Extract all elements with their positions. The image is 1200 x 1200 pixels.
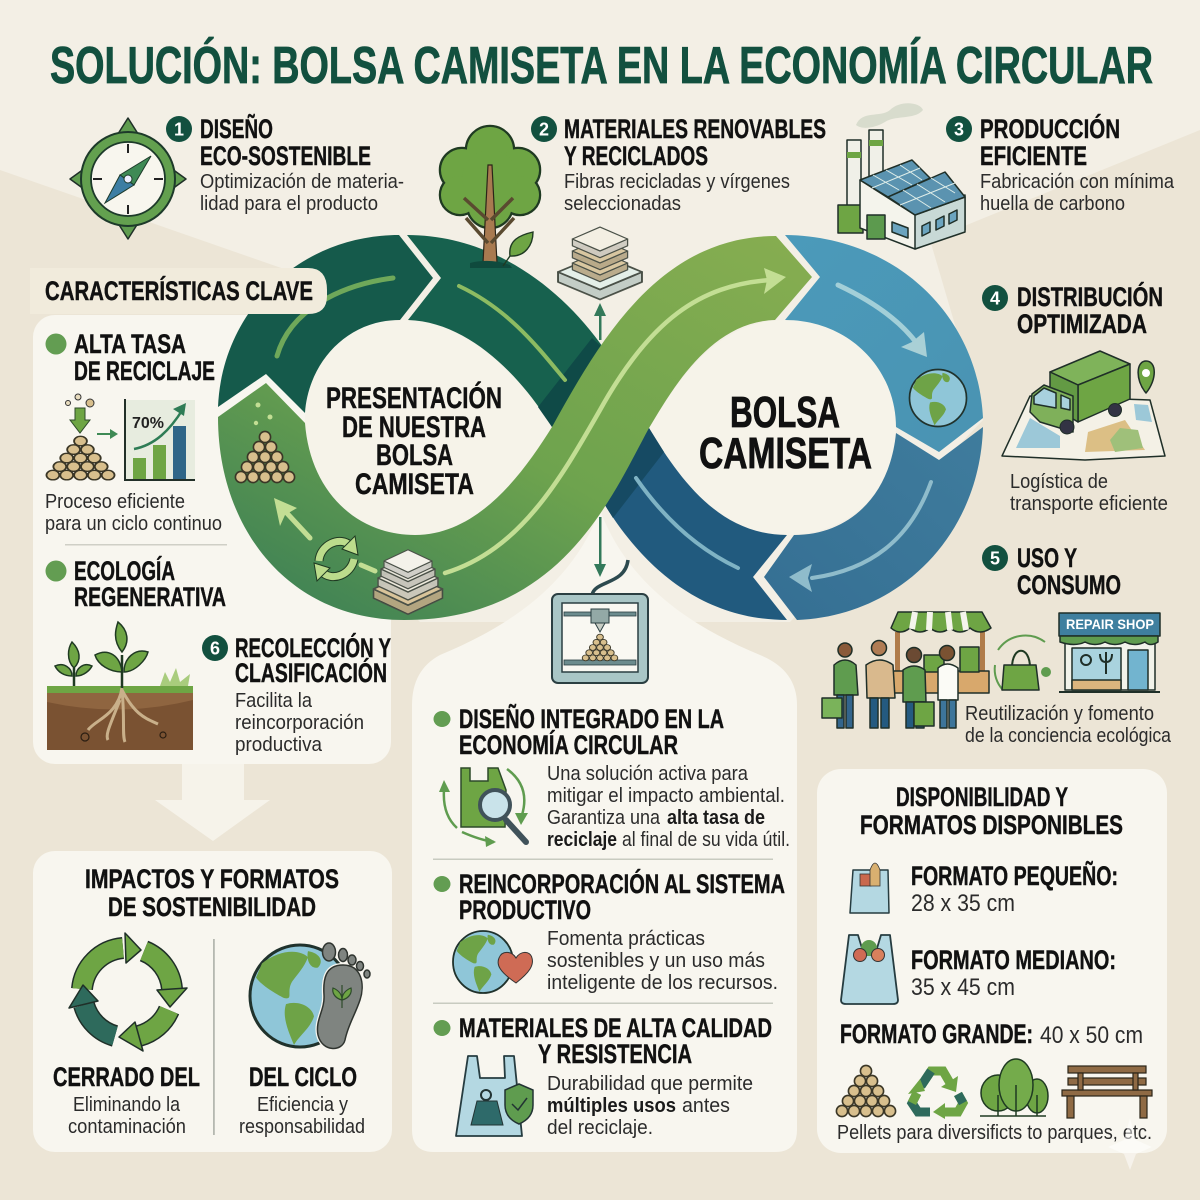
block: alta tasa de reciclaje: Proceso eficiente [45,490,185,513]
item: diseño integrado [434,703,790,851]
segment: dark green top left [218,235,433,413]
step 6: recolección y clasificación: productiva [235,733,323,756]
step 6: recolección y clasificación: reincorporación [235,711,364,734]
loop centre text: left: PRESENTACIÓN [326,381,502,415]
step 5: uso y consumo: CONSUMO [1017,570,1121,600]
loop centre text: right: BOLSA [730,388,840,437]
block: alta tasa de reciclaje: ALTA TASA [74,329,186,359]
icon: bench [1062,1066,1152,1118]
segment: dark blue lower centre [600,428,787,620]
item: diseño integrado: Garantiza una [547,806,661,829]
step 5: uso y consumo [822,543,1172,747]
step 1: diseño eco-sostenible: DISEÑO [200,113,273,144]
panel content: impactos [53,864,370,1138]
item: diseño integrado: alta tasa de [667,806,765,829]
badge 6: 6 [210,638,220,658]
step 3: producción eficiente: PRODUCCIÓN [980,113,1120,144]
step 4: distribución optimizada: transporte eficiente [1010,492,1168,515]
panel: centre background [412,510,797,1152]
badge 5 [982,545,1008,571]
icon: small bag [850,863,889,913]
segment: blue lower right [764,427,983,620]
icon: recycling arrows on loop [314,536,358,581]
badge 2 [531,116,557,142]
icon: market stall and shoppers [822,612,991,728]
panel content: disponibilidad: FORMATO MEDIANO: [911,945,1116,975]
step 5: uso y consumo: Reutilización y fomento [965,702,1154,725]
block: ecología regenerativa [46,555,226,750]
step 1: diseño eco-sostenible: lidad para el producto [200,192,378,215]
icon: material stack [558,227,642,300]
icon: tree [440,126,540,268]
step 1: diseño eco-sostenible [70,113,404,239]
step 6: recolección y clasificación: CLASIFICACIÓN [235,657,387,688]
icon: repair shop [1059,613,1160,692]
panel content: impactos: responsabilidad [239,1115,365,1138]
loop hole fills [305,320,896,535]
step 6: recolección y clasificación: RECOLECCIÓN Y [235,632,391,663]
loop centre text: right: CAMISETA [699,429,872,478]
badge 5: 5 [990,548,1000,568]
item: materiales de alta calidad: MATERIALES DE ALTA CALIDAD [459,1013,772,1043]
panel content: disponibilidad: Pellets para diversificts to parques, etc. [837,1121,1152,1144]
icon: pellets row [836,1065,896,1117]
icon: bag with magnifier [439,768,528,847]
item: materiales de alta calidad: antes [682,1094,730,1117]
icon: recycle triangle [908,1071,963,1119]
panel content: disponibilidad: FORMATOS DISPONIBLES [860,810,1123,840]
step 3: producción eficiente: huella de carbono [980,192,1125,215]
step 6: recolección y clasificación: Facilita la [235,689,313,712]
panel content: impactos: Eliminando la [73,1093,181,1116]
step 5: uso y consumo: USO Y [1017,543,1077,573]
chart: 70 percent bars: 70% [132,415,164,432]
badge 2: 2 [539,120,549,140]
icon: globe on loop [910,370,966,426]
panel content: disponibilidad: 28 x 35 cm [911,890,1015,917]
panel content: disponibilidad [836,782,1152,1170]
step 4: distribución optimizada [982,281,1168,515]
badge 6 [202,635,228,661]
icon: circular arrows [69,933,187,1051]
step 4: distribución optimizada: OPTIMIZADA [1017,309,1147,339]
icon: factory [838,103,965,249]
step 1: diseño eco-sostenible: ECO-SOSTENIBLE [200,141,371,171]
icon: green bag with cycle [995,635,1051,690]
item: reincorporación: PRODUCTIVO [459,895,591,925]
band arrows [277,278,931,578]
arrow: down to impactos [155,764,270,841]
loop centre text: left: CAMISETA [355,468,474,501]
step 3: producción eficiente [838,103,1175,249]
item: materiales de alta calidad: múltiples usos [547,1094,676,1117]
step 3: producción eficiente: EFICIENTE [980,141,1087,171]
panel content: centre [433,703,790,1139]
loop centre text: left [326,381,502,501]
icon: globe with heart [453,931,532,993]
badge 1: 1 [174,120,184,140]
item: diseño integrado: Una solución activa para [547,762,749,785]
step 2: materiales renovables: MATERIALES RENOVABLES [564,114,826,144]
block: alta tasa de reciclaje [45,329,222,535]
step 2: materiales renovables: Y RECICLADOS [564,141,708,171]
item: materiales de alta calidad [434,1013,772,1139]
tab: características clave: CARACTERÍSTICAS CLAVE [45,275,313,306]
block: ecología regenerativa: ECOLOGÍA [74,555,175,586]
item: reincorporación: Fomenta prácticas [547,927,705,950]
panel content: impactos: Eficiencia y [257,1093,349,1116]
infinity loop [218,235,983,620]
chart: 70 percent bars [125,399,195,480]
tab: características clave [30,268,327,314]
arrow: up to materiales [594,303,606,340]
panel content: disponibilidad: 40 x 50 cm [1040,1022,1143,1049]
segment: blue top right [785,235,983,452]
icon: medium bag [841,935,898,1004]
icon: pellets with down arrow [46,394,118,480]
item: materiales de alta calidad: Y RESISTENCIA [538,1039,692,1069]
loop centre text: left: DE NUESTRA [342,411,486,444]
item: diseño integrado: reciclaje [547,828,617,851]
step 6: recolección y clasificación [202,632,391,756]
item: reincorporación: sostenibles y un uso más [547,949,765,972]
segment: green S band [218,236,812,620]
icon: 3D printer [552,560,648,683]
panel content: impactos: IMPACTOS Y FORMATOS [85,864,339,894]
item: reincorporación: inteligente de los recursos. [547,971,778,994]
icon: bag with weight and shield [456,1056,533,1136]
icon: globe and footprint [250,943,370,1048]
block: alta tasa de reciclaje: para un ciclo continuo [45,512,222,535]
item: materiales de alta calidad: Durabilidad que permite [547,1072,753,1095]
panel: impactos background [33,851,392,1152]
item: materiales de alta calidad: del reciclaje. [547,1116,653,1139]
icon: material stack on loop [374,550,442,614]
icon: repair shop: REPAIR SHOP [1066,616,1154,632]
step 2: materiales renovables: seleccionadas [564,192,681,215]
block: ecología regenerativa: REGENERATIVA [74,582,226,612]
panel: características clave background [33,315,391,764]
step 2: materiales renovables [440,114,826,300]
arrow: down to printer [594,517,606,577]
step 2: materiales renovables: Fibras recicladas y vírgenes [564,170,790,193]
loop centre text: left: BOLSA [376,439,453,472]
panel content: impactos: DE SOSTENIBILIDAD [108,892,316,922]
badge 1 [166,116,192,142]
panel content: impactos: DEL CICLO [249,1062,357,1092]
step 5: uso y consumo: de la conciencia ecológica [965,724,1172,747]
segment: dark green top centre [407,235,605,427]
item: diseño integrado: mitigar el impacto ambiental. [547,784,785,807]
item: diseño integrado: DISEÑO INTEGRADO EN LA [459,703,724,734]
icon: compass [70,118,186,239]
loop centre text: right [699,388,872,478]
item: reincorporación [434,868,785,994]
badge 4: 4 [990,288,1000,308]
panel content: disponibilidad: 35 x 45 cm [911,974,1015,1001]
panel content: disponibilidad: FORMATO GRANDE: [840,1019,1033,1049]
icon: pellets on loop [235,402,295,483]
watermark sparkle [1108,1118,1152,1170]
item: diseño integrado: ECONOMÍA CIRCULAR [459,729,678,760]
step 3: producción eficiente: Fabricación con mínima [980,170,1175,193]
block: alta tasa de reciclaje: DE RECICLAJE [74,356,215,386]
panel content: disponibilidad: FORMATO PEQUEÑO: [911,860,1118,891]
item: reincorporación: REINCORPORACIÓN AL SISTEMA [459,868,785,899]
panel content: impactos: contaminación [68,1115,186,1138]
panel content: disponibilidad: DISPONIBILIDAD Y [896,782,1068,812]
icon: trees [980,1059,1048,1116]
panel: disponibilidad background [817,769,1167,1153]
badge 3: 3 [954,120,964,140]
icon: truck on map [1002,351,1165,460]
badge 4 [982,285,1008,311]
item: diseño integrado: al final de su vida útil. [622,828,790,851]
badge 3 [946,116,972,142]
step 4: distribución optimizada: Logística de [1010,470,1108,493]
icon: plant with roots [47,622,193,750]
step 1: diseño eco-sostenible: Optimización de materia- [200,170,404,193]
panel content: impactos: CERRADO DEL [53,1062,200,1092]
